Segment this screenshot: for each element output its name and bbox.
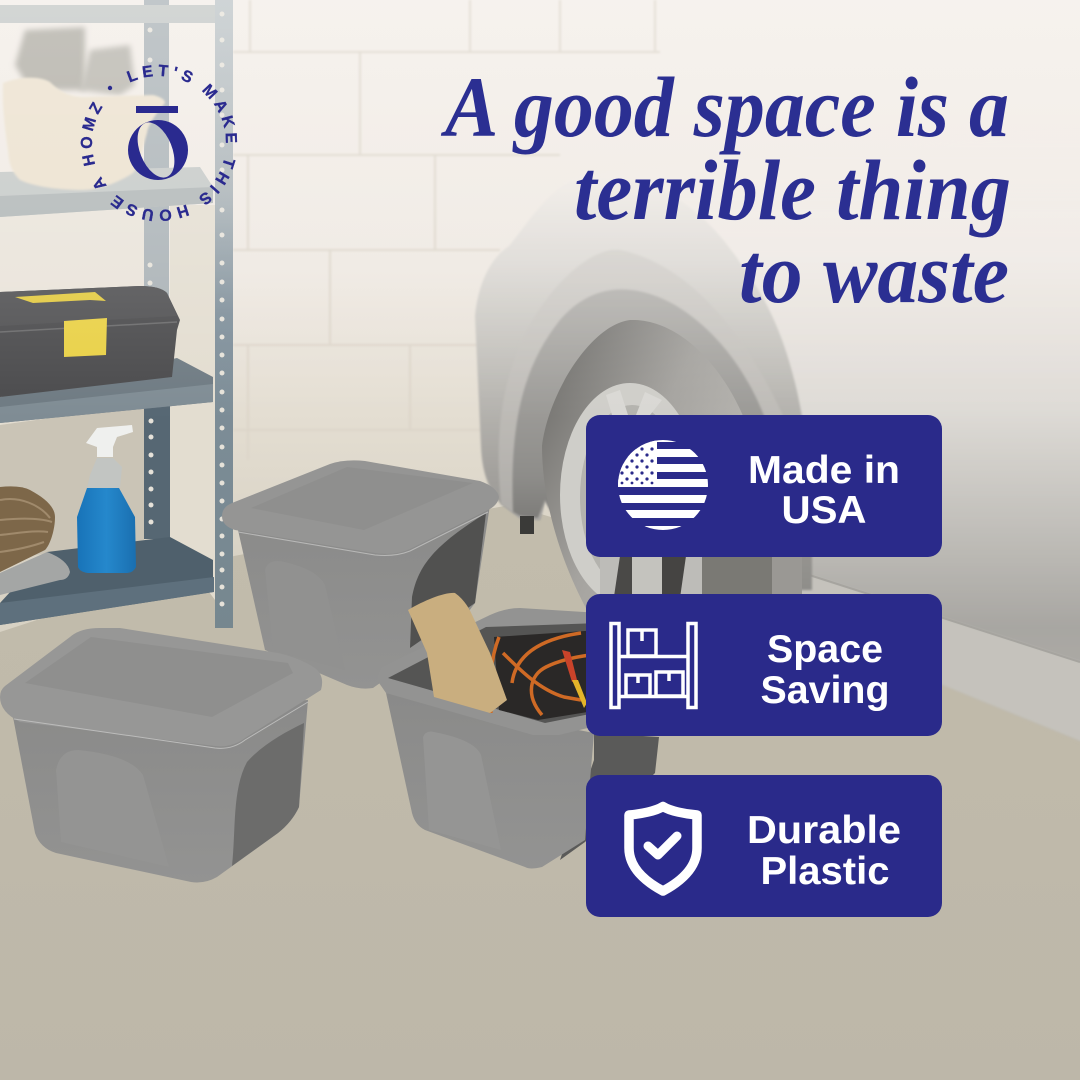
panel: Durable Plastic (586, 775, 942, 917)
photo: metal shelving unit (0, 0, 233, 628)
icon: shield with check mark (629, 806, 697, 891)
photo: coiled rope and folded towel (0, 486, 70, 595)
label: Durable Plastic: Plastic (760, 850, 890, 893)
title: terrible thing (574, 142, 1011, 238)
icon: storage shelves with boxes (611, 624, 696, 708)
photo: woven basket with dried plants (3, 27, 165, 190)
photo: blue spray bottle (77, 425, 136, 573)
label: Made in USA (748, 449, 900, 532)
label: Made in USA: USA (782, 489, 866, 532)
panel: Space Saving (586, 594, 942, 736)
title (440, 59, 1011, 321)
panel: Made in USA (586, 415, 942, 557)
title: to waste (739, 225, 1009, 321)
photo: car with fender and wheel (475, 130, 1080, 750)
photo: open storage bin with gloves and orange cables (377, 593, 659, 868)
photo: front left storage bin with lid (0, 628, 322, 882)
label: Durable Plastic: Durable (747, 809, 901, 852)
title: A good space is a (440, 59, 1009, 155)
logo mark: barred O (128, 106, 188, 180)
label: Durable Plastic (747, 809, 901, 893)
label: Space Saving: Space (767, 628, 883, 671)
soft top haze over photo (0, 0, 1080, 420)
label: Made in USA: Made in (748, 449, 900, 492)
photo: back storage bin with lid (222, 460, 499, 689)
label: Space Saving: Saving (760, 669, 890, 712)
label: Space Saving (760, 628, 890, 712)
photo: gray toolbox with yellow label (0, 286, 180, 397)
icon: American flag circle (618, 440, 708, 530)
logo: circular tagline with O mark: LET'S MAKE THIS HOUSE A HOMZ (80, 64, 238, 222)
